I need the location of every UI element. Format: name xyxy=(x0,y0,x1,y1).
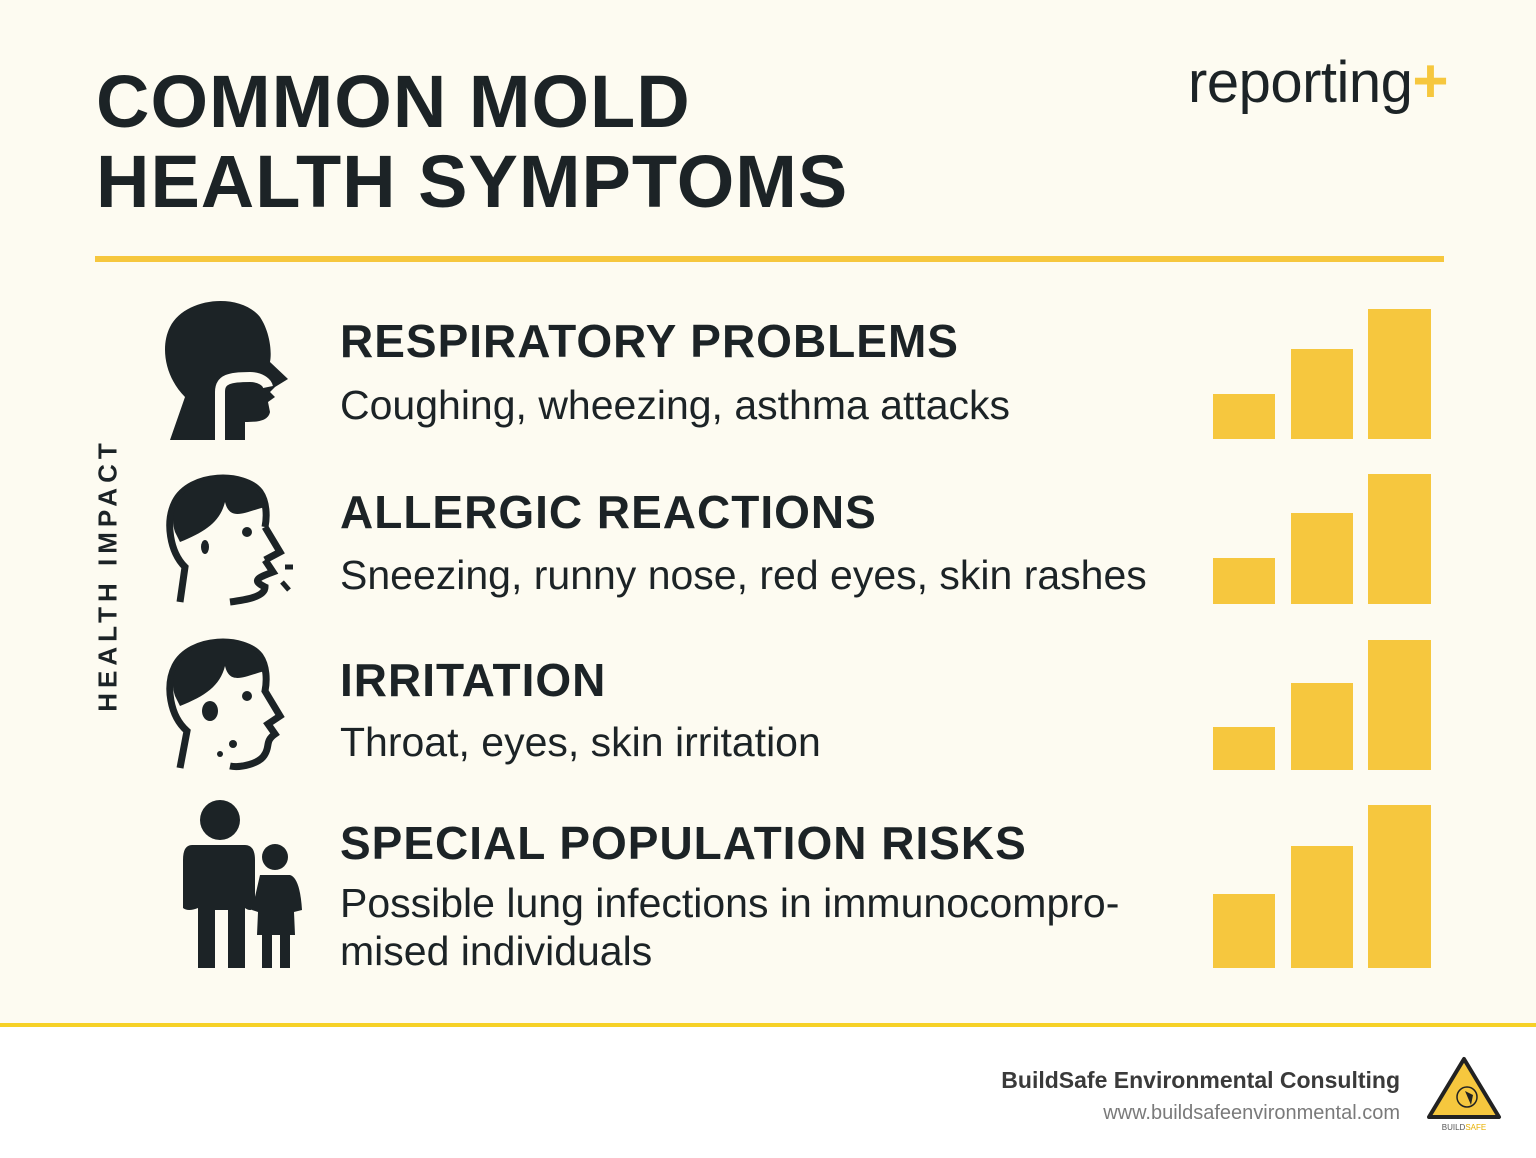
logo: buildsafe triangle: BUILDSAFE xyxy=(1442,1123,1486,1132)
item: respiratory: RESPIRATORY PROBLEMS xyxy=(340,315,959,367)
axis label: health impact: HEALTH IMPACT xyxy=(92,438,122,712)
item: irritation: IRRITATION xyxy=(340,654,606,706)
text: Possible lung infections in immunocompro- xyxy=(340,880,1119,926)
footer company text: www.buildsafeenvironmental.com xyxy=(1103,1102,1400,1124)
logo: buildsafe triangle xyxy=(1427,1056,1502,1132)
footer xyxy=(0,1023,1536,1158)
title: COMMON MOLD xyxy=(96,60,691,143)
bars row 3 xyxy=(1213,640,1431,770)
icon: adult and child xyxy=(183,800,302,968)
divider xyxy=(95,256,1444,262)
icon: head respiratory xyxy=(165,301,288,440)
bars row 4 xyxy=(1213,805,1431,968)
bars row 1 xyxy=(1213,309,1431,439)
text: Coughing, wheezing, asthma attacks xyxy=(340,382,1010,428)
logo: reporting+: reporting+ xyxy=(1188,47,1448,116)
text: Sneezing, runny nose, red eyes, skin rashes xyxy=(340,552,1147,598)
footer company text xyxy=(1001,1067,1400,1124)
text: Throat, eyes, skin irritation xyxy=(340,719,821,765)
footer company text: BuildSafe Environmental Consulting xyxy=(1001,1067,1400,1093)
item: allergic: ALLERGIC REACTIONS xyxy=(340,486,877,538)
title: HEALTH SYMPTOMS xyxy=(96,140,848,223)
title xyxy=(96,60,848,223)
bars row 2 xyxy=(1213,474,1431,604)
icon: irritated face xyxy=(166,638,285,770)
icon: sneezing face xyxy=(166,474,293,606)
item: special populations: SPECIAL POPULATION RISKS xyxy=(340,817,1027,869)
text: mised individuals xyxy=(340,928,652,974)
